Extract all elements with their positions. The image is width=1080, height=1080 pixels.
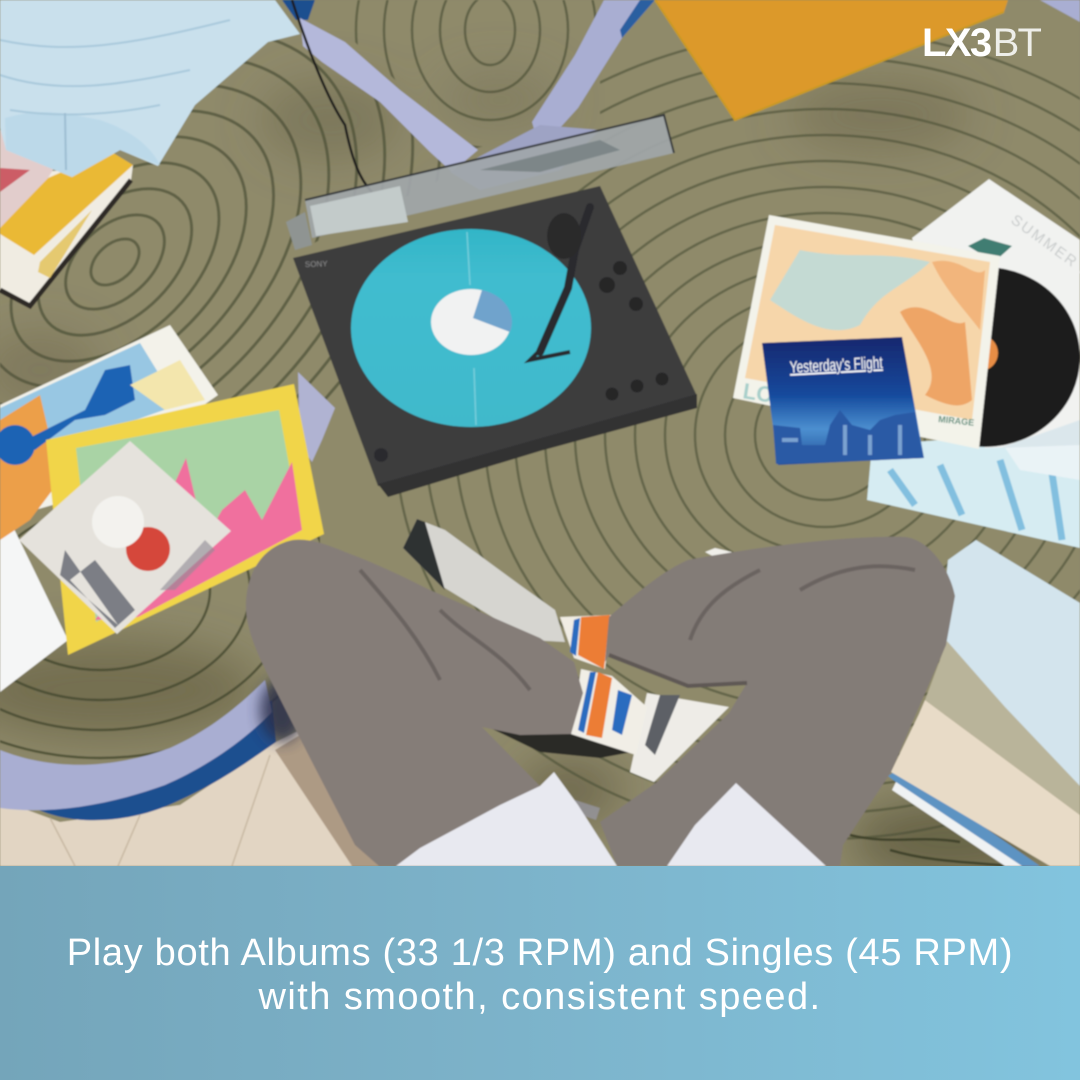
band behind turntable (298, 372, 335, 462)
blue rim (35, 700, 276, 820)
lavender band (0, 680, 272, 810)
SONY wordmark: SONY (305, 259, 328, 269)
platter: teal record (351, 229, 591, 427)
white summer album and black vinyl (890, 179, 1080, 448)
rug contour lines: right set (365, 31, 1080, 839)
rug contour lines: lower-left set (0, 522, 320, 760)
right leg (600, 537, 955, 866)
turntable (286, 115, 697, 497)
knobs (613, 261, 627, 275)
yellow album (46, 384, 324, 655)
plinth (293, 186, 697, 486)
dark shadow under legs (478, 700, 632, 758)
left leg (246, 540, 583, 866)
rug contour lines: top set (354, 0, 596, 148)
swirl album (733, 215, 1000, 449)
power cable (292, 0, 372, 192)
right lower albums (888, 540, 1080, 866)
top left band (282, 0, 315, 20)
caption banner (0, 866, 1080, 1080)
rug patch between legs (572, 800, 600, 820)
lower right marbled album (867, 430, 1080, 548)
swirl album: LO (741, 378, 775, 408)
caption text: with smooth, consistent speed. (258, 976, 822, 1018)
rug shading (0, 70, 1050, 880)
pillow: blue striped (0, 0, 300, 177)
stack of books (0, 130, 133, 308)
person: shoes and socks (403, 519, 732, 782)
palm tree album (0, 325, 218, 520)
white sheet (0, 500, 68, 692)
rug contour lines: left set (0, 40, 442, 405)
top right band (532, 0, 655, 150)
record label (431, 289, 511, 355)
person: grey trousers (246, 537, 955, 866)
small album with red apple (19, 441, 231, 634)
dust cover (305, 115, 674, 238)
caption text: Play both Albums (33 1/3 RPM) and Singles (45 RPM) (67, 932, 1013, 974)
yellow pillow (655, 0, 1008, 120)
shirt cuffs (396, 772, 826, 866)
swirl album: MIRAGE (938, 414, 975, 428)
CD: Yesterday's Flight (762, 337, 924, 465)
caption text (67, 932, 1013, 1018)
tonearm (540, 207, 590, 352)
floor (0, 730, 395, 866)
CD: Yesterday's Flight: Yesterday's Flight (789, 353, 883, 377)
left albums (0, 325, 324, 692)
logo: LX3BT: LX3BT (922, 21, 1040, 65)
rug contour lines: lower-right (850, 835, 1010, 866)
